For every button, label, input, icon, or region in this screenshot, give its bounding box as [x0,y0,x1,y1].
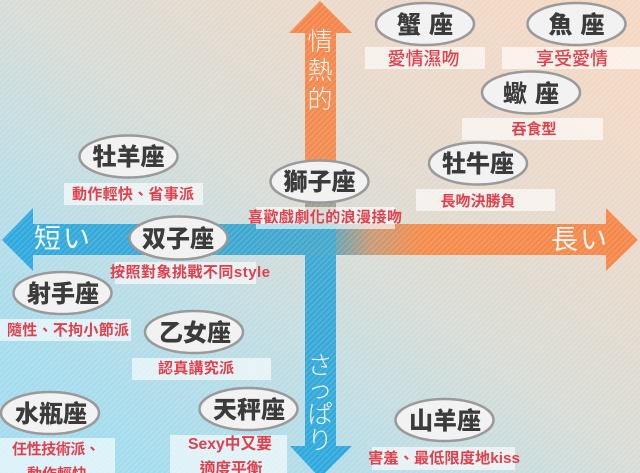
axis label: 短い: 短い [34,224,90,254]
sign: 水瓶座: 水瓶座 [15,400,87,428]
sign: 天秤座: 天秤座 [213,396,285,424]
axis label: さっぱり: さ [307,352,333,380]
caption: 雙子座: 按照對象挑戰不同style [110,263,270,281]
caption: 蠍座: 吞食型 [512,120,556,138]
axis label: 長い: 長い [551,225,607,255]
sign: 牡羊座 [64,136,203,205]
sign: 射手座 [0,272,131,341]
axis label: 情熱的: 情 [307,28,333,56]
axis label: 情熱的 [307,28,333,114]
sign: 牡牛座: 牡牛座 [442,150,514,178]
caption: 牡牛座: 長吻決勝負 [440,192,516,210]
sign: 魚座: 魚座 [548,11,604,39]
sign: 雙子座: 双子座 [142,225,214,253]
sign: 魚座 [502,3,640,69]
sign: 山羊座: 山羊座 [409,407,481,435]
axis label: 情熱的: 的 [307,86,333,114]
sign: 天秤座 [170,388,298,473]
caption: 獅子座: 喜歡戲劇化的浪漫接吻 [248,208,402,226]
sign: 獅子座 [248,160,402,229]
arrow centre overlap [305,224,336,255]
axis label: さっぱり: ぱ [307,401,333,429]
caption: 天秤座 [170,435,287,473]
caption: 天秤座: Sexy中又要 [188,435,272,453]
arrow: vertical axis [289,1,352,473]
sign: 蠍座: 蠍座 [503,80,559,108]
sign: 山羊座 [368,399,520,470]
caption: 蠍座 [462,118,603,140]
sign: 牡羊座: 牡羊座 [92,143,164,171]
arrow: horizontal axis [2,208,638,271]
caption: 山羊座: 害羞、最低限度地kiss [368,449,520,467]
caption: 蟹座: 愛情濕吻 [388,49,460,69]
sign: 乙女座 [132,311,271,380]
sign: 蟹座: 蟹座 [397,11,453,39]
caption: 牡羊座: 動作輕快、省事派 [72,185,194,203]
sign: 射手座: 射手座 [27,280,99,308]
sign: 牡牛座 [416,142,555,211]
axis label: 情熱的: 熱 [307,57,333,85]
sign: 蟹座 [365,3,485,69]
sign: 水瓶座 [0,392,115,473]
caption: 水瓶座 [0,438,115,473]
sign: 乙女座: 乙女座 [159,319,231,347]
sign: 獅子座: 獅子座 [284,168,356,196]
caption: 射手座: 隨性、不拘小節派 [7,321,129,339]
sign: 蠍座 [462,72,603,140]
caption: 魚座: 享受愛情 [536,49,608,69]
axis label: さっぱり [307,352,333,455]
caption: 水瓶座: 任性技術派、 [12,440,100,458]
axis label: さっぱり: っ [307,376,333,404]
caption: 乙女座: 認真講究派 [158,359,234,377]
axis label: さっぱり: り [307,427,333,455]
sign: 雙子座 [110,216,270,284]
